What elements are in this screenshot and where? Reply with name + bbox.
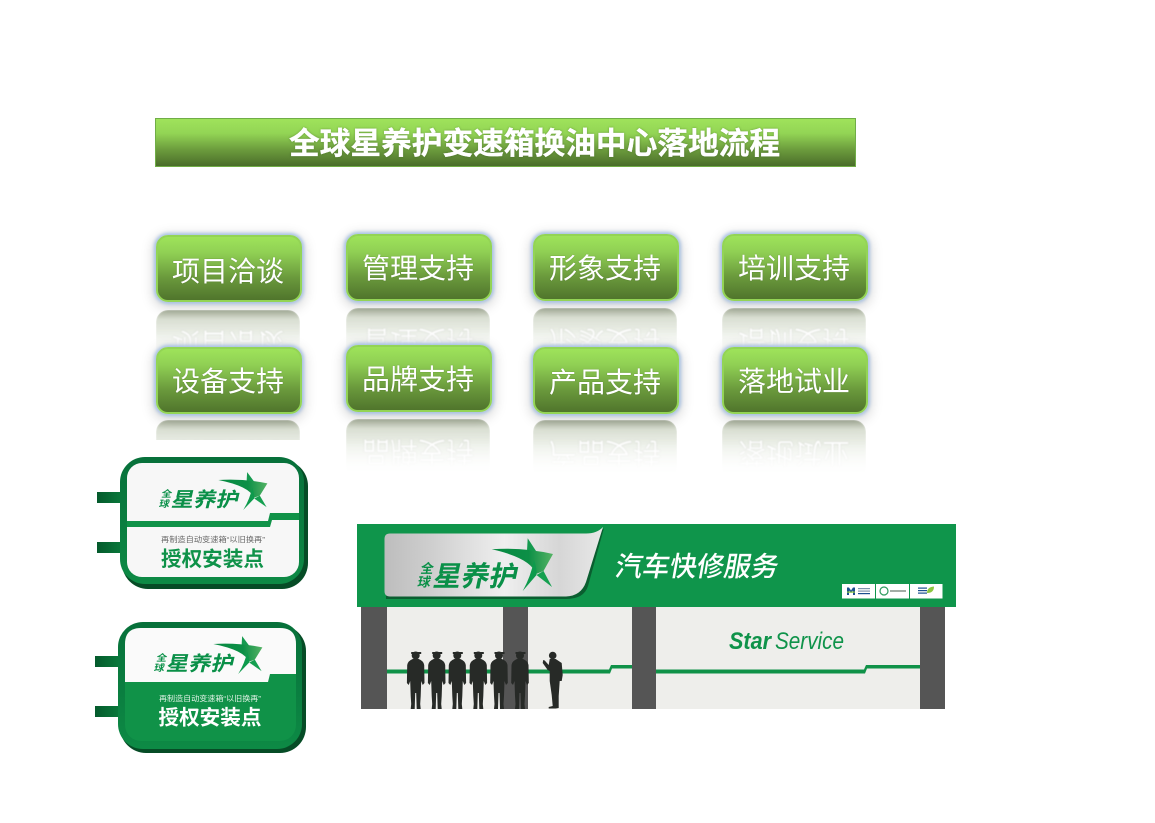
step button: 落地试业: 落地试业 (738, 366, 850, 397)
wall brand name: Star (729, 628, 772, 655)
fascia (357, 524, 956, 607)
reflection: 管理支持 (346, 308, 490, 344)
logo: 球 (153, 661, 166, 674)
reflection: 设备支持: 设备支持 (172, 437, 284, 468)
title (155, 118, 856, 167)
reflection: 设备支持 (156, 420, 300, 440)
sign frame (120, 457, 308, 589)
step button: 管理支持: 管理支持 (362, 253, 474, 284)
pillars (361, 606, 945, 709)
step button: 产品支持 (533, 347, 679, 414)
step button: 培训支持: 培训支持 (738, 253, 850, 284)
reflection: 产品支持: 产品支持 (549, 437, 661, 468)
logo: 星养护 (169, 488, 242, 511)
fascia heading: 汽车快修服务 (613, 551, 781, 582)
step button: 形象支持 (533, 234, 679, 301)
reflection: 项目洽谈: 项目洽谈 (172, 327, 284, 358)
step button: 品牌支持: 品牌支持 (362, 364, 474, 395)
sign 2: green lightbox (95, 622, 306, 753)
person 5 (490, 652, 508, 709)
person 6 (511, 652, 529, 709)
white upper panel (125, 628, 296, 682)
partner logos (842, 584, 942, 598)
sign frame (118, 622, 306, 753)
sign caption: 再制造自动变速箱“以旧换再” (161, 535, 266, 544)
reflection: 形象支持 (533, 308, 677, 344)
reflection: 品牌支持: 品牌支持 (362, 436, 474, 467)
step button: 落地试业 (722, 347, 868, 414)
reflection: 培训支持: 培训支持 (738, 325, 850, 356)
step button: 项目洽谈: 项目洽谈 (172, 256, 284, 287)
logo: 球 (416, 575, 432, 589)
reflection: 产品支持 (533, 420, 677, 460)
wall stripes (387, 665, 920, 674)
logo (416, 538, 553, 592)
logo: 全 (155, 652, 168, 664)
reflection: 培训支持 (722, 308, 866, 344)
reflection: 形象支持: 形象支持 (549, 325, 661, 356)
presenter (543, 652, 563, 708)
logo: 全 (160, 488, 173, 500)
step button: 培训支持 (722, 234, 868, 301)
reflection: 品牌支持 (346, 419, 490, 459)
sign heading: 授权安装点 (161, 548, 264, 571)
logo: 星养护 (431, 560, 521, 592)
step button: 形象支持: 形象支持 (549, 253, 661, 284)
title: 全球星养护变速箱换油中心落地流程 (289, 126, 780, 161)
reflection: 落地试业 (722, 420, 866, 461)
wall brand name: Service (775, 628, 844, 655)
reflection: 管理支持: 管理支持 (362, 325, 474, 356)
logo: 全 (419, 560, 435, 576)
step button: 设备支持: 设备支持 (172, 366, 284, 397)
storefront (357, 524, 956, 709)
step button: 项目洽谈 (156, 235, 302, 302)
person 2 (428, 652, 446, 709)
step button: 产品支持: 产品支持 (549, 367, 661, 398)
green stripe (127, 513, 299, 527)
white cover behind signs (0, 440, 346, 500)
logo: 球 (158, 497, 171, 510)
logo: 星养护 (164, 652, 237, 675)
step button: 品牌支持 (346, 345, 492, 412)
person 3 (448, 652, 466, 709)
person 1 (407, 652, 424, 709)
logo (153, 636, 262, 675)
step button: 管理支持 (346, 234, 492, 301)
sign 1: white lightbox (97, 457, 308, 589)
silver logo plate (384, 527, 604, 599)
step button: 设备支持 (156, 347, 302, 414)
person 4 (470, 652, 487, 709)
reflection: 落地试业: 落地试业 (738, 437, 850, 468)
sign heading: 授权安装点 (158, 706, 261, 730)
reflection: 项目洽谈 (156, 310, 300, 346)
staff silhouettes (407, 652, 563, 709)
bracket arms (95, 656, 120, 717)
logo (158, 472, 267, 511)
sign caption: 再制造自动变速箱“以旧换再” (159, 694, 262, 703)
bracket arms (97, 492, 123, 553)
shop wall (387, 606, 921, 709)
